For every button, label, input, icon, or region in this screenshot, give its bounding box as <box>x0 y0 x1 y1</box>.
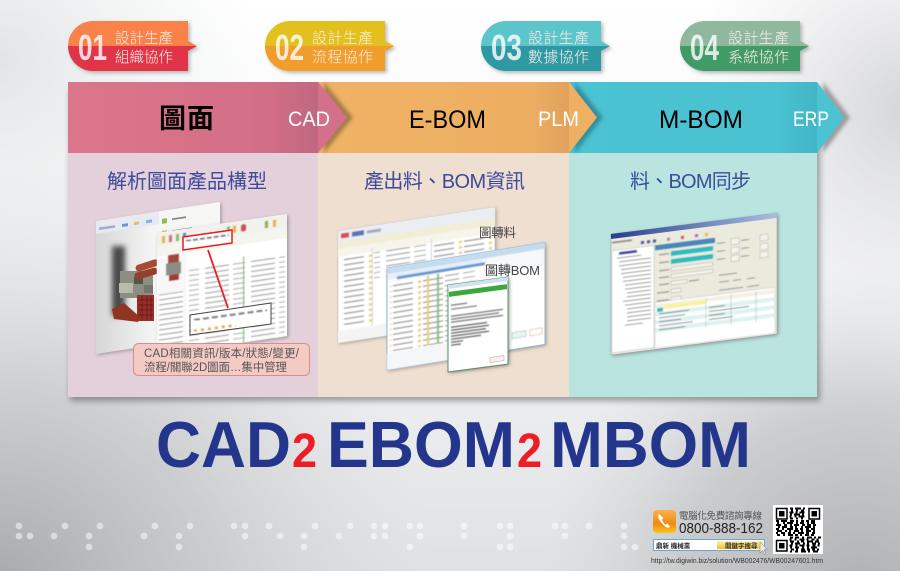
main title: CAD2EBOM2MBOM: EBOM <box>327 408 515 481</box>
callout <box>134 344 310 376</box>
QR code <box>773 505 823 554</box>
screenshot highlight box <box>183 230 232 250</box>
heading: E-BOM: E-BOM <box>409 106 486 134</box>
search box: 鼎新 機械業 <box>656 541 691 550</box>
badge 04: 設計生產 <box>728 30 789 47</box>
callout: 流程/關聯2D圖面…集中管理 <box>144 360 288 374</box>
hotline label: 電腦化免費諮詢專線 <box>679 510 762 522</box>
label: ERP: ERP <box>793 108 829 131</box>
badge 03 <box>481 21 612 73</box>
3D machine model <box>112 246 160 322</box>
badge 03: 03 <box>491 27 522 68</box>
badge 01 <box>68 21 199 73</box>
pointer arrow line <box>208 250 228 308</box>
panel shadow <box>70 90 820 401</box>
badge 02: 02 <box>275 27 304 68</box>
main title: CAD2EBOM2MBOM: MBOM <box>550 408 751 481</box>
URL: http://tw.digiwin.biz/solution/WB002476/WB00247601.htm <box>651 556 823 565</box>
label: CAD: CAD <box>288 108 330 131</box>
badge 02: 設計生產 <box>312 30 373 47</box>
main title: CAD2EBOM2MBOM: 2 <box>292 425 317 478</box>
badge 03: 數據協作 <box>528 49 589 66</box>
screenshot: BOM list window <box>387 242 546 372</box>
badge 01: 組織協作 <box>115 49 173 66</box>
header: E-BOM / PLM arrow <box>318 82 603 153</box>
panel: E-BOM body <box>318 153 569 397</box>
badge 04: 系統協作 <box>728 49 789 66</box>
heading: 圖面: 圖面 <box>159 104 214 134</box>
main title: CAD2EBOM2MBOM: 2 <box>517 425 542 478</box>
panel: M-BOM body <box>569 153 817 397</box>
label: 圖轉料: 圖轉料 <box>479 226 516 240</box>
icon: phone <box>653 510 676 533</box>
subheading: 產出料、BOM資訊: 產出料、BOM資訊 <box>364 170 525 193</box>
search box <box>654 540 768 554</box>
zoomed toolbar popup <box>190 303 271 335</box>
badge 02 <box>265 21 396 73</box>
main title: CAD2EBOM2MBOM <box>156 408 751 481</box>
braille dot decoration <box>16 523 638 550</box>
screenshot: result dialog <box>448 277 510 374</box>
badge 01: 01 <box>78 27 107 68</box>
panel: 圖面 body <box>68 153 318 397</box>
badge 01: 設計生產 <box>115 30 173 47</box>
main title: CAD2EBOM2MBOM: CAD <box>156 408 291 481</box>
heading: M-BOM: M-BOM <box>659 106 743 134</box>
badge 04: 04 <box>690 27 719 68</box>
callout: CAD相關資訊/版本/狀態/變更/ <box>144 346 300 360</box>
badge 04 <box>680 21 811 73</box>
header: M-BOM / ERP arrow <box>569 82 850 153</box>
search box: 關鍵字搜尋 <box>725 541 758 550</box>
subheading: 料、BOM同步: 料、BOM同步 <box>630 170 751 193</box>
screenshot: CAD file list window <box>157 214 288 356</box>
screenshot: ERP window <box>611 213 778 356</box>
contact block <box>651 505 823 565</box>
screenshot: PLM system window <box>338 207 496 344</box>
label: 圖轉BOM: 圖轉BOM <box>485 263 540 278</box>
hotline number: 0800-888-162 <box>679 520 763 537</box>
screenshot: CAD model window <box>96 202 222 356</box>
badge 03: 設計生產 <box>528 30 589 47</box>
badge 02: 流程協作 <box>312 49 373 66</box>
label: PLM: PLM <box>538 108 579 131</box>
subheading: 解析圖面產品構型: 解析圖面產品構型 <box>107 170 267 193</box>
header: 圖面 / CAD arrow <box>68 82 353 153</box>
